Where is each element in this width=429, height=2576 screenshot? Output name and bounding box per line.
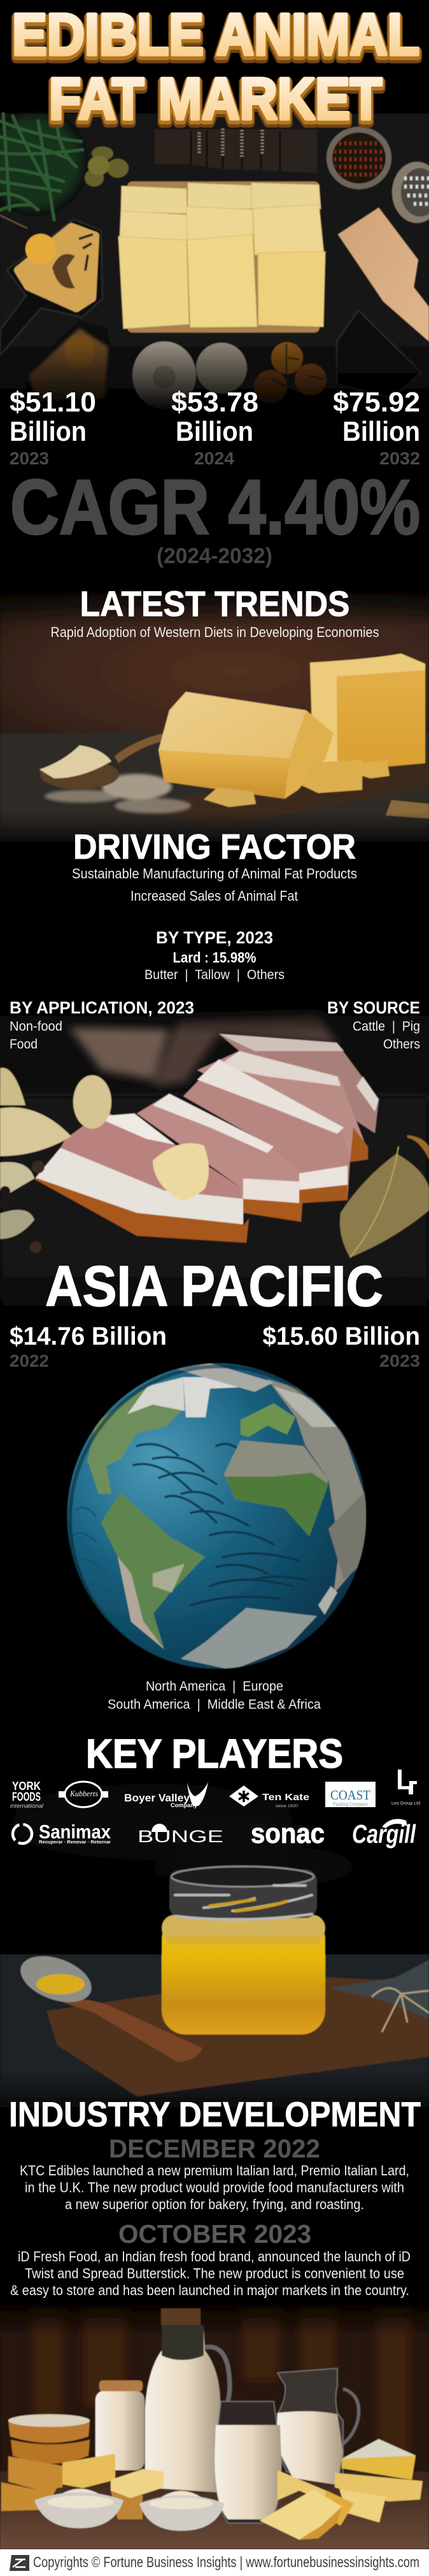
slice 2: [137, 1094, 302, 1222]
photo: pork belly slices: [0, 1000, 429, 1322]
segment: by application: [10, 998, 194, 1052]
logo: coast packing: Packing Company: [333, 1801, 368, 1807]
footer bar: [0, 2549, 429, 2576]
icon: peppercorns: [0, 1161, 45, 1253]
value 2022: 2022: [10, 1352, 49, 1371]
icon: wooden board: [127, 182, 320, 333]
icon: peppercorn bowl: [327, 127, 391, 189]
icon: bay leaf: [340, 1135, 429, 1257]
continent: arctic and north america: [87, 1387, 182, 1466]
continent: south america: [101, 1492, 205, 1649]
salt scatter: [45, 774, 191, 813]
icon: dark seeded bread: [155, 129, 317, 173]
value 2022: $14.76 Billion: [10, 1322, 167, 1350]
icon: garlic slice on meat: [153, 1143, 209, 1201]
icon: spoon: [15, 1947, 202, 2062]
icon: jar: [162, 1866, 325, 2035]
slice 4: [197, 1051, 368, 1162]
logo: bunge: BUNGE: [137, 1827, 223, 1846]
title line 2: FAT MARKET: [49, 69, 382, 136]
icon: wooden board: [129, 755, 429, 827]
by type heading: BY TYPE, 2023: [156, 928, 273, 947]
slice 3: [183, 1059, 350, 1203]
value 2023: [262, 1322, 420, 1371]
logo: kubberts: Kubberts: [69, 1789, 98, 1798]
trends title: LATEST TRENDS: [80, 583, 350, 624]
stat 2023: 2023: [10, 448, 49, 468]
other regions list: [108, 1679, 321, 1712]
date heading: DECEMBER 2022: [109, 2134, 320, 2163]
continent: europe: [241, 1403, 295, 1437]
title: [12, 1, 419, 136]
company logos: [10, 1770, 420, 1849]
icon: tomatoes: [254, 342, 327, 403]
description: [20, 2163, 409, 2212]
slice 5: [219, 1034, 379, 1133]
other types: Butter | Tallow | Others: [144, 968, 285, 982]
CAGR period: (2024-2032): [157, 544, 272, 568]
stat 2024: 2024: [194, 448, 234, 468]
ocean currents: [73, 1444, 306, 1605]
logo: leo group: [391, 1770, 420, 1806]
logo: york foods: YORK: [12, 1780, 41, 1792]
regional values: [10, 1322, 420, 1371]
icon: mushrooms: [132, 341, 247, 409]
icon: glass of milk: [215, 2401, 281, 2523]
heading: driving factor: [72, 827, 357, 904]
heading: latest trends: [51, 583, 379, 640]
description: a new superior option for bakery, frying, and roasting.: [65, 2196, 364, 2212]
continent: antarctica: [181, 1608, 317, 1670]
icon: bread bowls: [8, 2414, 90, 2464]
stat 2024: Billion: [176, 416, 253, 447]
stat 2024: $53.78: [171, 387, 258, 418]
icon: empty black pan: [337, 310, 421, 398]
food: Food: [10, 1037, 38, 1052]
icon: cheese blocks left: [1, 2454, 164, 2519]
logo: boyer valley: [124, 1782, 208, 1808]
others: Others: [383, 1037, 420, 1052]
driving factor line 2: Increased Sales of Animal Fat: [130, 888, 298, 904]
shaded limb: [70, 1366, 369, 1672]
stat 2023: [10, 387, 96, 468]
logo: coast packing: [325, 1782, 376, 1807]
globe: [67, 1363, 369, 1672]
heading: key players: KEY PLAYERS: [86, 1731, 343, 1777]
continent: africa: [224, 1440, 328, 1536]
cattle and pig: Cattle | Pig: [353, 1019, 420, 1034]
logo: bunge: [137, 1824, 223, 1846]
by application heading: BY APPLICATION, 2023: [10, 998, 194, 1017]
icon: pan with cheese sauce: [0, 219, 102, 355]
segment: by type: [144, 928, 285, 982]
logo: york foods: [10, 1780, 44, 1809]
description: [10, 2249, 411, 2298]
logo: kubberts: [59, 1782, 108, 1807]
title line 2: FAT MARKET: [49, 66, 382, 132]
icon: back butter block: [310, 654, 425, 767]
icon: dill sprig: [0, 113, 83, 228]
CAGR: [10, 464, 420, 568]
driving factor line 1: Sustainable Manufacturing of Animal Fat Products: [72, 866, 357, 882]
photo: cheese board flat lay: [0, 113, 429, 413]
icon: white bowls with rice: [34, 2489, 225, 2531]
by source heading: BY SOURCE: [327, 998, 420, 1017]
market size stats: [10, 387, 420, 468]
icon: milk bottle: [145, 2308, 220, 2493]
icon: grey cloth with twine: [327, 1960, 429, 2032]
logo: coast packing: COAST: [330, 1787, 370, 1803]
icon: wooden spatula: [338, 208, 429, 341]
logo: leo group: Leo Group Ltd: [391, 1801, 420, 1806]
icon: milk jar with cork: [95, 2380, 144, 2470]
icon: spoon with salt: [39, 733, 165, 789]
icon: fortune business insights logo: [10, 2555, 29, 2571]
bottom fade: [0, 344, 429, 413]
value 2022: [10, 1322, 167, 1371]
value 2023: $15.60 Billion: [262, 1322, 420, 1350]
icon: cheese wedges right: [260, 2439, 423, 2540]
stat 2032: Billion: [342, 416, 420, 447]
heading: asia pacific: ASIA PACIFIC: [45, 1255, 383, 1319]
photo: jar of ghee: [0, 1784, 429, 2128]
photo: dairy products: [0, 2300, 429, 2549]
date heading: OCTOBER 2023: [118, 2219, 311, 2249]
driving factor title: DRIVING FACTOR: [73, 827, 356, 866]
logo: sonac: sonac: [251, 1818, 325, 1849]
stat 2023: Billion: [10, 416, 87, 447]
logo: boyer valley: Company: [171, 1802, 197, 1808]
value 2023: 2023: [379, 1352, 420, 1371]
non-food: Non-food: [10, 1019, 62, 1034]
icon: jug: [276, 2368, 359, 2485]
icon: garlic cloves: [0, 1068, 111, 1239]
development: october 2023: [10, 2219, 411, 2298]
photo: butter blocks: [0, 586, 429, 854]
icon: bottle handle: [205, 2347, 230, 2411]
logo: ten kate: Ten Kate: [262, 1792, 309, 1803]
logo: boyer valley: Boyer Valley: [124, 1792, 190, 1804]
cheese slices: [118, 183, 325, 329]
continent: asia: [267, 1379, 366, 1594]
logo: ten kate: since 1920: [276, 1805, 299, 1808]
stat 2032: $75.92: [333, 387, 420, 418]
logo: sanimax: Recuperar · Renovar · Retornar: [39, 1840, 111, 1845]
icon: butter pieces: [204, 760, 429, 819]
trends text: Rapid Adoption of Western Diets in Developing Economies: [51, 624, 379, 640]
regions row 1: North America | Europe: [146, 1679, 283, 1694]
icon: salt bowl: [392, 162, 429, 223]
stat 2024: [171, 387, 258, 468]
icon: second pan: [20, 320, 112, 408]
logo: ten kate: [229, 1785, 309, 1808]
stat 2032: 2032: [379, 448, 420, 468]
logo: york foods: international: [10, 1803, 44, 1809]
blurred back slices: [68, 1013, 337, 1086]
logo: york foods: FOODS: [12, 1791, 41, 1804]
stat 2023: $51.10: [10, 387, 96, 418]
icon: wooden board: [46, 1977, 429, 2096]
logo: sanimax: Sanimax: [39, 1821, 111, 1843]
segment: by source: [327, 998, 420, 1052]
icon: front butter block: [158, 692, 334, 799]
slice 1: [34, 1111, 249, 1243]
logo: sanimax: [13, 1821, 111, 1845]
title line 2: FAT MARKET: [49, 68, 382, 134]
icon: olives: [85, 147, 129, 187]
lard share: Lard : 15.98%: [173, 949, 256, 966]
regions row 2: South America | Middle East & Africa: [108, 1698, 321, 1712]
stat 2032: [333, 387, 420, 468]
development: december 2022: [20, 2134, 409, 2212]
